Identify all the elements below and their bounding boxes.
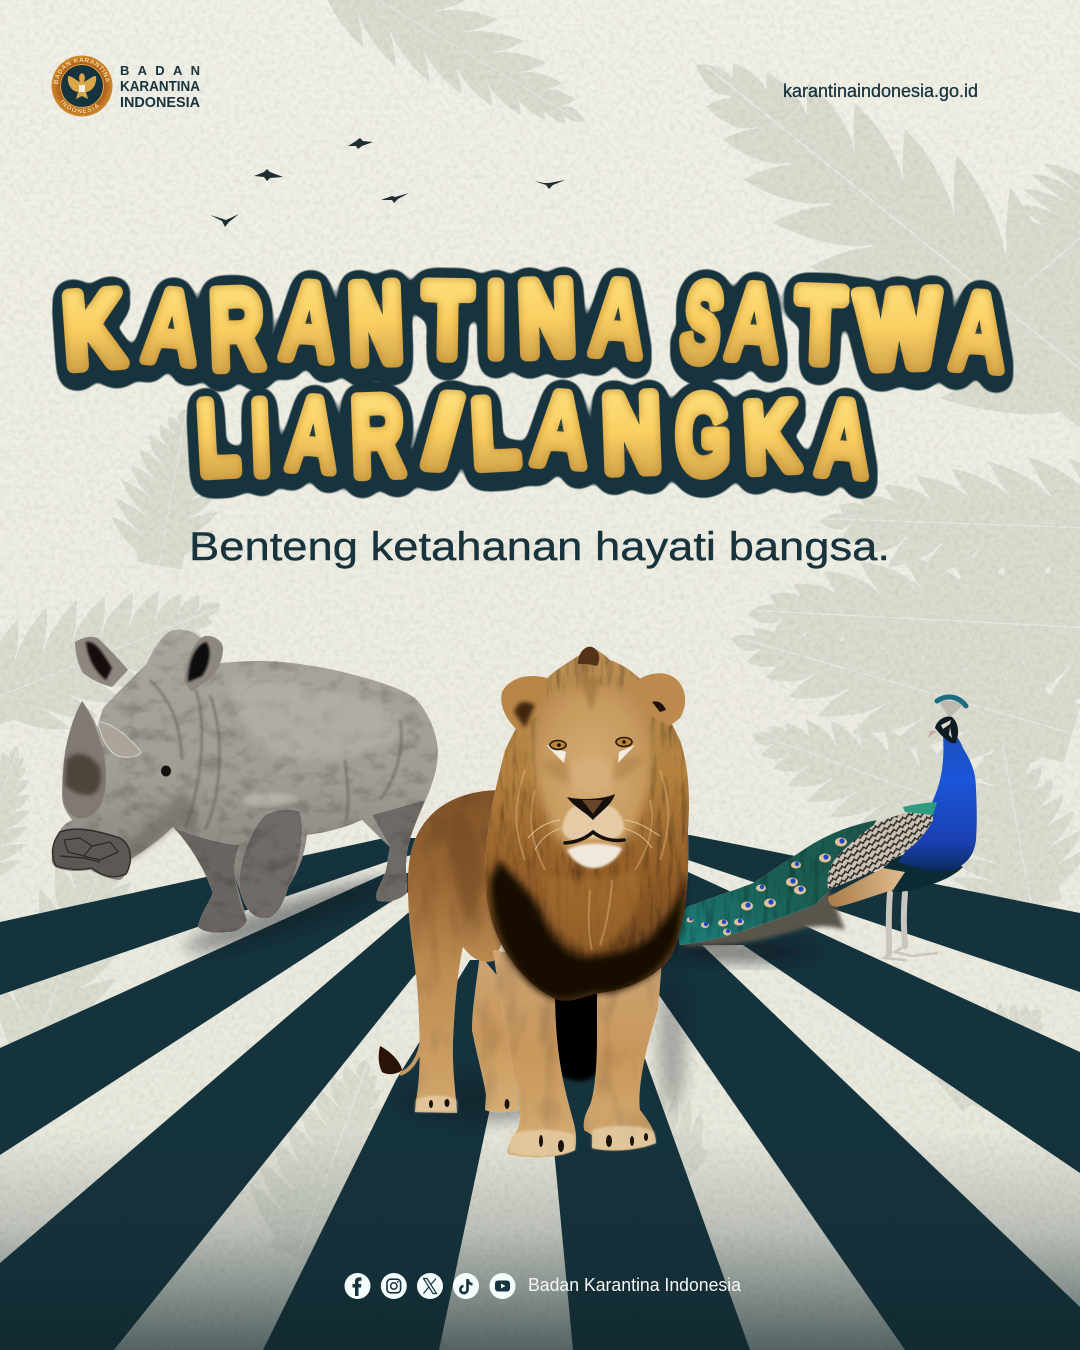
peacock green patch <box>903 802 937 815</box>
peacock brown wing <box>828 868 905 907</box>
icon: tiktok <box>453 1273 479 1299</box>
lion body and rear left leg <box>408 790 520 1113</box>
lion rear right leg <box>472 955 519 1112</box>
peacock tail eyes <box>686 838 847 936</box>
icon: facebook <box>344 1273 370 1299</box>
title: KARANTINA SATWA LIAR/LANGKA: S <box>675 258 730 386</box>
rhino right ear <box>184 636 223 692</box>
title: KARANTINA SATWA LIAR/LANGKA: R <box>349 374 407 501</box>
title: KARANTINA SATWA LIAR/LANGKA: G <box>676 374 730 497</box>
lion mane highlights <box>516 770 668 950</box>
rhino body <box>52 629 438 933</box>
title: KARANTINA SATWA LIAR/LANGKA: W <box>856 268 942 390</box>
title: KARANTINA SATWA LIAR/LANGKA: A <box>586 255 649 382</box>
lion paw highlights <box>415 1096 656 1156</box>
flock of birds <box>210 138 565 227</box>
logo: Badan Karantina Indonesia <box>52 56 200 116</box>
icon: instagram <box>381 1273 407 1299</box>
lion mane <box>485 648 689 1000</box>
peacock legs <box>889 893 905 954</box>
lion tuft <box>578 647 599 666</box>
lion mouth <box>565 832 624 843</box>
peacock <box>678 697 977 960</box>
sunburst rays <box>0 835 1080 1350</box>
rhino muzzle <box>53 829 130 877</box>
title: KARANTINA SATWA LIAR/LANGKA: T <box>794 267 846 384</box>
title: KARANTINA SATWA LIAR/LANGKA: A <box>528 368 594 492</box>
lion dark lower mane <box>490 860 687 999</box>
title: KARANTINA SATWA LIAR/LANGKA: L <box>469 380 521 488</box>
title: KARANTINA SATWA LIAR/LANGKA: A <box>282 373 343 496</box>
lion shoulder fold shade <box>451 810 485 925</box>
title: KARANTINA SATWA LIAR/LANGKA: T <box>423 263 472 379</box>
peacock head <box>935 717 958 743</box>
lion nose <box>567 794 615 820</box>
peacock crest <box>938 700 966 716</box>
title: KARANTINA SATWA LIAR/LANGKA: K <box>741 383 801 493</box>
peacock dark belly <box>883 852 963 892</box>
lion whiskers <box>528 820 660 850</box>
lion white chin <box>567 844 622 868</box>
lion claws <box>429 1099 648 1152</box>
lion eyes <box>546 738 635 763</box>
social media row <box>344 1273 742 1299</box>
title: KARANTINA SATWA LIAR/LANGKA: A <box>812 375 875 502</box>
lion left ear <box>501 676 547 730</box>
rhino horn <box>62 701 106 819</box>
footer handle: Badan Karantina Indonesia <box>528 1275 742 1295</box>
peacock feet <box>884 946 937 960</box>
rhino supporting leg <box>173 827 247 933</box>
logo: Badan Karantina Indonesia: INDONESIA <box>120 94 200 111</box>
lion front left leg <box>493 950 576 1157</box>
title: KARANTINA SATWA LIAR/LANGKA: N <box>347 260 405 385</box>
rhinoceros <box>52 629 438 933</box>
title: KARANTINA SATWA LIAR/LANGKA: A <box>946 268 1011 396</box>
title: KARANTINA SATWA LIAR/LANGKA: A <box>138 265 204 388</box>
rhino left ear <box>75 637 128 687</box>
rhino dark neck and jaw shading <box>120 790 197 860</box>
title: KARANTINA SATWA LIAR/LANGKA: R <box>207 266 266 394</box>
title: KARANTINA SATWA LIAR/LANGKA: / <box>424 379 461 487</box>
peacock tail fringe <box>680 885 845 946</box>
title: KARANTINA SATWA LIAR/LANGKA: I <box>487 263 505 378</box>
title: KARANTINA SATWA LIAR/LANGKA: K <box>60 269 127 389</box>
bottom dark gradient <box>0 1130 1080 1350</box>
lion tail <box>400 1040 422 1074</box>
rhino front leg <box>239 809 302 918</box>
peacock striped wing <box>827 808 933 890</box>
logo emblem: BADAN KARANTINA <box>54 58 110 84</box>
subtitle: Benteng ketahanan hayati bangsa. <box>189 525 890 569</box>
lion chest fur <box>540 865 645 952</box>
lion brow shade <box>540 755 645 783</box>
logo emblem: INDONESIA <box>60 99 100 114</box>
lion muzzle <box>562 803 624 840</box>
title: KARANTINA SATWA LIAR/LANGKA: N <box>517 260 577 378</box>
rhino mottled lighter back <box>230 680 405 760</box>
logo wordmark: B A D A N <box>120 63 200 78</box>
rhino belly highlight <box>242 793 298 807</box>
title: KARANTINA SATWA LIAR/LANGKA <box>60 255 1011 502</box>
logo emblem <box>52 56 112 116</box>
title: KARANTINA SATWA LIAR/LANGKA: A <box>276 258 341 386</box>
lion forehead fold <box>578 676 600 712</box>
lion front right leg <box>584 960 662 1150</box>
peacock neck and breast <box>898 732 977 871</box>
title: KARANTINA SATWA LIAR/LANGKA: I <box>250 381 271 496</box>
peacock tail <box>678 820 877 945</box>
rhino second horn <box>98 722 141 757</box>
lion black gap between legs <box>553 980 600 1081</box>
rhino shading and folds <box>150 680 401 830</box>
website url: karantinaindonesia.go.id <box>783 80 978 101</box>
rhino rear leg <box>372 800 425 902</box>
logo: Badan Karantina Indonesia: KARANTINA <box>120 78 200 95</box>
contact shadows under animals <box>181 868 815 1122</box>
lion right ear <box>627 673 685 726</box>
title: KARANTINA SATWA LIAR/LANGKA: A <box>722 259 785 386</box>
title: KARANTINA SATWA LIAR/LANGKA: L <box>195 380 241 497</box>
icon: youtube <box>490 1273 516 1299</box>
lion face <box>533 686 652 865</box>
title: KARANTINA SATWA LIAR/LANGKA: N <box>601 372 663 495</box>
rhino eye <box>161 766 171 776</box>
lion <box>379 647 689 1157</box>
lion nose bridge <box>570 758 612 792</box>
icon: x <box>417 1273 443 1299</box>
